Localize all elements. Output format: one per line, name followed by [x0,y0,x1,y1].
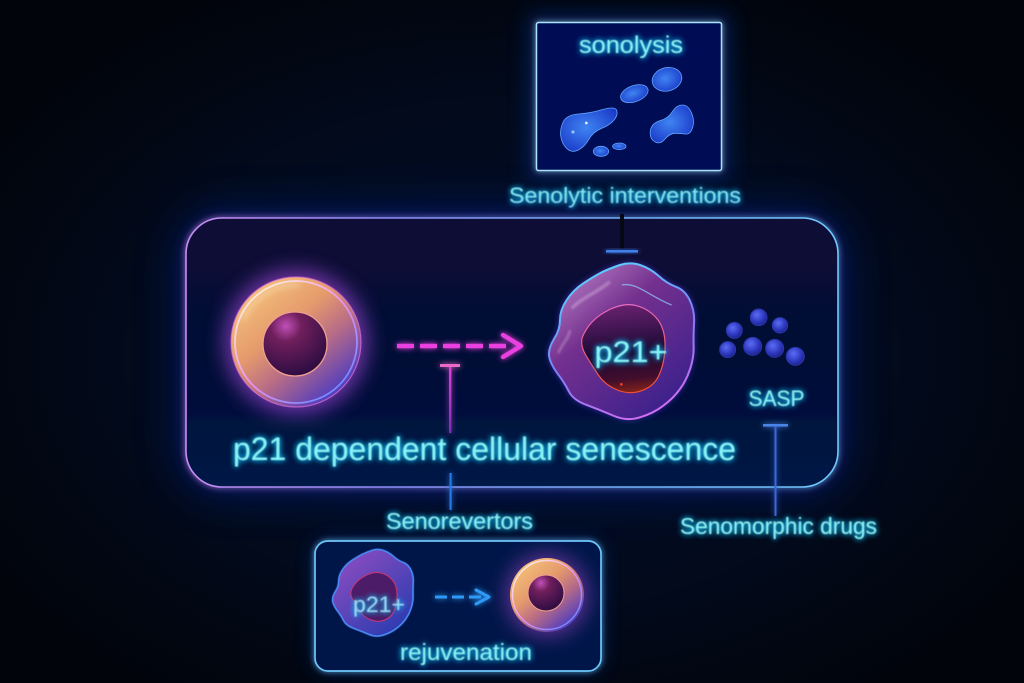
panel: top sonolysis box [528,14,730,179]
icon: fragmented cell pieces [561,64,693,156]
icon: senescent cell p21+ [549,263,694,419]
label: Senorevertors: Senorevertors [386,508,533,534]
label: rejuvenation: rejuvenation [400,639,532,665]
inhibitor: senomorphic line [763,424,788,516]
label: SASP: SASP [748,386,804,411]
arrow: dashed magenta transition [397,335,521,357]
inhibitor: senorevertor line [440,364,460,510]
label: Senolytic interventions: Senolytic interventions [509,183,741,208]
icon: healthy cell [224,270,368,414]
icon: small healthy cell [506,554,588,636]
label: p21+: p21+ [594,336,668,369]
arrow: dashed blue [435,590,489,604]
icon: SASP particles [720,309,804,365]
label: small p21+: p21+ [353,592,405,617]
panel: rejuvenation box [315,541,601,671]
heading: sonolysis: sonolysis [579,32,683,59]
panel: main senescence panel [180,212,844,493]
label: Senomorphic drugs: Senomorphic drugs [680,513,877,539]
title: p21 dependent cellular senescence: p21 dependent cellular senescence [233,431,736,467]
icon: small senescent cell [333,550,413,636]
inhibitor: senolytic line [606,214,638,253]
